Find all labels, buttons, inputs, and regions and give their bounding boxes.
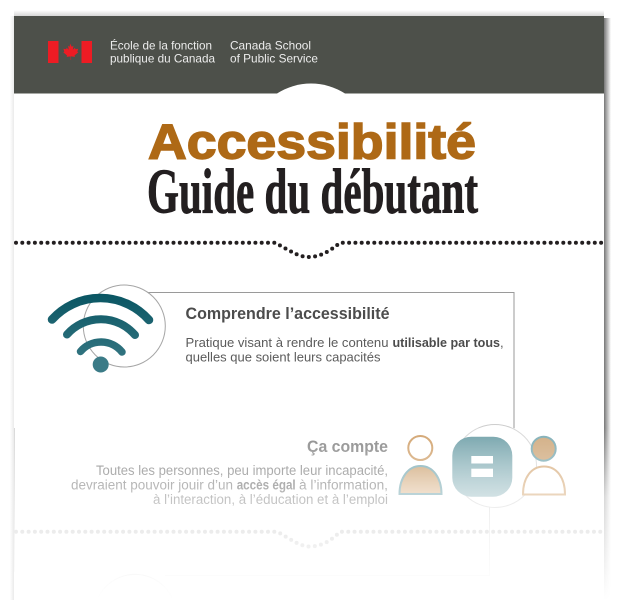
title: Accessibilité: Accessibilité xyxy=(148,116,476,170)
header text: French wordmark xyxy=(110,38,215,66)
heading: Ça compte: Ça compte xyxy=(307,438,388,456)
text block: ça compte: accès égal xyxy=(237,478,296,492)
circle behind wifi icon xyxy=(83,285,165,367)
header text: French wordmark: École de la fonction xyxy=(110,38,212,52)
text block: definition: quelles que soient leurs capacités xyxy=(186,350,381,364)
header band xyxy=(14,16,604,94)
header text: English wordmark: of Public Service xyxy=(230,52,318,66)
text block: ça compte: Toutes les personnes, peu importe leur incapacité, xyxy=(96,463,388,478)
text block: definition: Pratique visant à rendre le contenu xyxy=(186,335,388,350)
header text: English wordmark xyxy=(230,38,318,66)
text block: ça compte: à l’information, xyxy=(299,478,388,492)
header text: French wordmark: publique du Canada xyxy=(110,52,215,66)
header notch circle xyxy=(277,84,345,94)
panel: comprendre outline xyxy=(148,292,514,428)
text block: definition: utilisable par tous xyxy=(392,335,500,350)
text block: ça compte: devraient pouvoir jouir d’un xyxy=(71,478,233,492)
text block: ça compte: à l’interaction, à l’éducation et à l’emploi xyxy=(153,492,388,507)
fade overlay on page xyxy=(14,428,604,600)
header text: English wordmark: Canada School xyxy=(230,38,311,52)
icon: left person xyxy=(400,436,442,494)
circle behind equal icon xyxy=(454,424,536,508)
Government of Canada flag xyxy=(48,41,92,63)
panel: ça compte outline xyxy=(14,428,514,576)
icon: right person xyxy=(523,437,565,494)
icon: equals sign tile xyxy=(452,437,512,497)
text block: definition: , xyxy=(500,335,504,350)
text block: definition xyxy=(186,335,504,364)
dotted divider top xyxy=(16,243,604,257)
dotted divider bottom xyxy=(16,532,604,546)
text block: ça compte xyxy=(71,463,388,507)
icon: wifi xyxy=(52,298,149,372)
faded circle of next section xyxy=(97,574,173,600)
heading: Comprendre l'accessibilité: Comprendre l’accessibilité xyxy=(186,305,390,323)
fade overlay on right shadow xyxy=(604,428,618,600)
